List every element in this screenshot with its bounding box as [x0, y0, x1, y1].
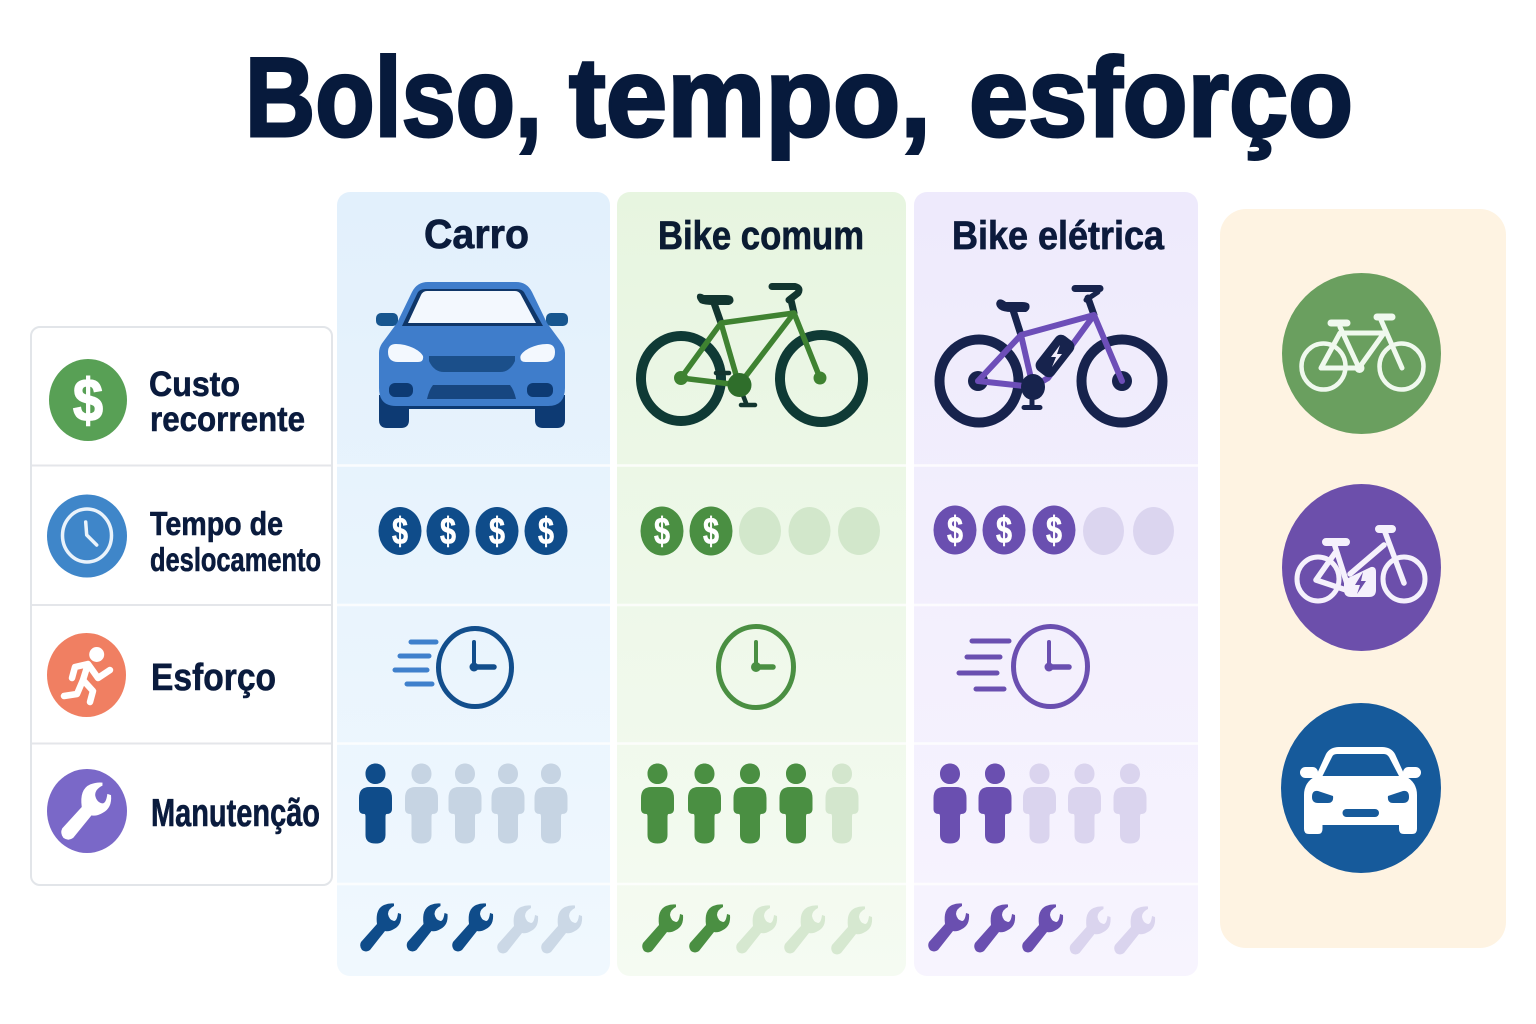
badge: electric bicycle	[1282, 484, 1441, 651]
heading: carro: Carro	[424, 211, 529, 257]
label text: manutenção: Manutenção	[151, 792, 320, 835]
maintenance rating: bike comum	[642, 904, 872, 954]
panel: carro	[337, 192, 610, 976]
icon: clock	[47, 494, 127, 578]
cost rating: bike comum	[640, 506, 880, 556]
panel: row labels	[31, 327, 332, 885]
effort rating: bike comum	[641, 764, 858, 844]
label text: tempo de deslocamento: Tempo de	[150, 505, 283, 542]
panel: bike comum	[617, 192, 906, 976]
row label: esforço	[47, 633, 276, 717]
icon: runner	[47, 633, 126, 717]
heading: bike comum: Bike comum	[658, 214, 864, 258]
badge: bicycle	[1282, 273, 1441, 434]
badge: car	[1281, 703, 1441, 873]
panel: bike elétrica	[914, 192, 1198, 976]
effort rating: bike elétrica	[934, 764, 1146, 844]
title	[245, 35, 1353, 160]
icon: electric bicycle	[940, 288, 1162, 422]
row label: custo recorrente	[49, 359, 305, 441]
label text: esforço: Esforço	[151, 657, 276, 699]
cost rating: carro: $	[489, 511, 505, 553]
maintenance rating: carro	[360, 903, 582, 954]
clock: bike comum	[718, 626, 794, 708]
cost rating: carro: $	[538, 511, 554, 553]
icon: dollar: $	[73, 367, 103, 434]
row label: tempo de deslocamento	[47, 494, 321, 578]
label text: custo recorrente	[149, 365, 305, 439]
panel: ranking summary	[1220, 209, 1506, 948]
cost rating: bike elétrica: $	[1046, 510, 1062, 552]
heading: bike elétrica: Bike elétrica	[952, 214, 1165, 258]
cost rating: bike elétrica	[934, 506, 1174, 555]
maintenance rating: bike elétrica	[928, 903, 1155, 954]
title: esforço	[969, 35, 1353, 160]
label text: tempo de deslocamento: deslocamento	[150, 541, 321, 578]
cost rating: carro	[378, 507, 568, 555]
title: Bolso,	[245, 35, 542, 160]
title: tempo,	[569, 35, 931, 160]
cost rating: bike comum: $	[654, 511, 670, 553]
label text: tempo de deslocamento	[150, 505, 321, 578]
row label: manutenção	[47, 769, 320, 853]
icon: car	[376, 282, 568, 428]
icon: dollar	[49, 359, 127, 441]
fast clock: carro	[395, 628, 512, 706]
effort rating: carro	[359, 764, 568, 844]
icon: bicycle	[641, 286, 863, 422]
fast clock: bike elétrica	[959, 626, 1088, 706]
cost rating: bike elétrica: $	[996, 510, 1012, 552]
cost rating: bike comum: $	[703, 511, 719, 553]
cost rating: carro: $	[392, 511, 408, 553]
icon: wrench	[47, 769, 127, 853]
label text: custo recorrente: Custo	[149, 365, 240, 404]
label text: custo recorrente: recorrente	[150, 400, 305, 439]
cost rating: carro: $	[440, 511, 456, 553]
cost rating: bike elétrica: $	[947, 510, 963, 552]
